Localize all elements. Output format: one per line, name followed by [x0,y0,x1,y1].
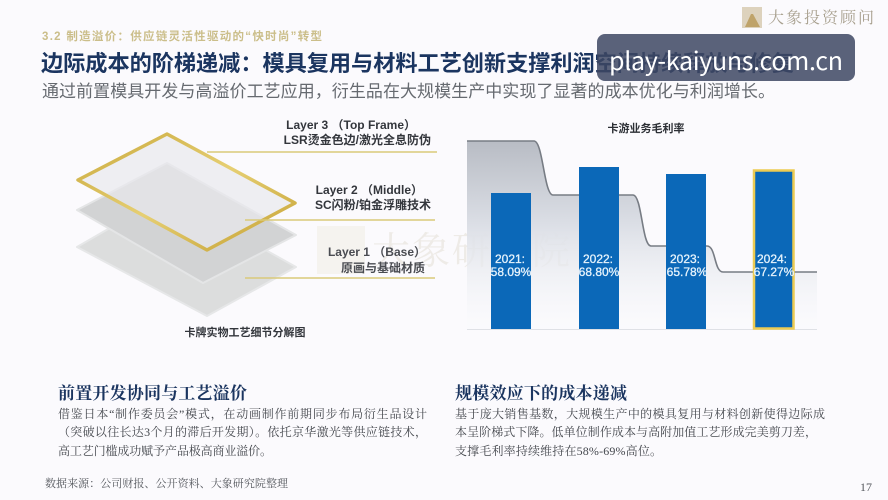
heading: 前置开发协同与工艺溢价 [58,383,247,403]
label: layer 2: Layer 2 （Middle） [316,183,423,197]
label: layer 1 [328,245,426,275]
panel: scale effect [455,384,825,458]
body text: 借鉴日本“制作委员会”模式，在动画制作前期同步布局衍生品设计 [58,406,427,421]
body text: （突破以往长达3个月的滞后开发期）。依托京华激光等供应链技术， [58,424,427,439]
bar 2021: 2021: [495,252,525,266]
background watermark: 大象研究院 [372,231,570,273]
baseline [467,328,817,330]
label: layer 3 [284,118,431,147]
bar 2022: 2022: [583,252,613,266]
leader lines [207,152,437,278]
panel: front-end development [58,383,427,458]
layer 2 card [77,163,296,283]
label: layer 3: Layer 3 （Top Frame） [286,118,416,132]
diagram caption: 卡牌实物工艺细节分解图 [184,325,306,339]
body text: 支撑毛利率持续维持在58%-69%高位。 [455,443,662,458]
bar 2024 highlighted: 2024: [757,252,787,266]
title: 边际成本的阶梯递减：模具复用与材料工艺创新支撑利润空间持续释放与修复 [41,51,794,76]
logo: top right brand: 大象投资顾问 [768,9,874,27]
label: layer 1: 原画与基础材质 [341,260,425,275]
layer 3 gold frame card [78,134,295,250]
bar 2024 highlighted [754,170,795,328]
chart: gross margin [467,141,817,330]
cost step line [467,141,817,272]
body text [58,406,427,458]
card layer diagram [77,134,296,316]
bar 2021: 58.09% [491,265,532,279]
bar 2023 [666,174,708,329]
label: layer 1: Layer 1 （Base） [328,245,426,259]
source note: 数据来源：公司财报、公开资料、大象研究院整理 [45,476,288,490]
logo: top right brand [742,7,874,28]
label: layer 2 [315,183,431,212]
body text: 基于庞大销售基数，大规模生产中的模具复用与材料创新使得边际成 [455,406,825,421]
watermark overlay banner: play-kaiyuns.com.cn [609,42,843,78]
body text: 本呈阶梯式下降。低单位制作成本与高附加值工艺形成完美剪刀差， [455,424,817,439]
heading: 规模效应下的成本递减 [455,384,627,403]
label: layer 3: LSR烫金色边/激光全息防伪 [284,132,431,147]
body text: 高工艺门槛成功赋予产品极高商业溢价。 [58,443,272,458]
bar 2023: 65.78% [667,265,708,279]
bar 2021 [491,193,532,329]
bar 2022 [579,167,620,329]
bar 2023: 2023: [670,252,700,266]
watermark overlay banner [597,34,855,81]
bar 2024 highlighted: 67.27% [754,265,795,279]
page number: 17 [860,480,872,494]
layer 1 card [77,195,296,316]
bar 2022: 68.80% [579,265,620,279]
body text [455,406,825,458]
background watermark [317,226,570,274]
section label: 3.2 制造溢价：供应链灵活性驱动的“快时尚”转型 [42,29,322,43]
chart title: 卡游业务毛利率 [608,121,684,135]
cost step area [467,141,817,329]
label: layer 2: SC闪粉/铂金浮雕技术 [315,197,431,212]
subtitle: 通过前置模具开发与高溢价工艺应用，衍生品在大规模生产中实现了显著的成本优化与利润增长。 [42,82,775,101]
